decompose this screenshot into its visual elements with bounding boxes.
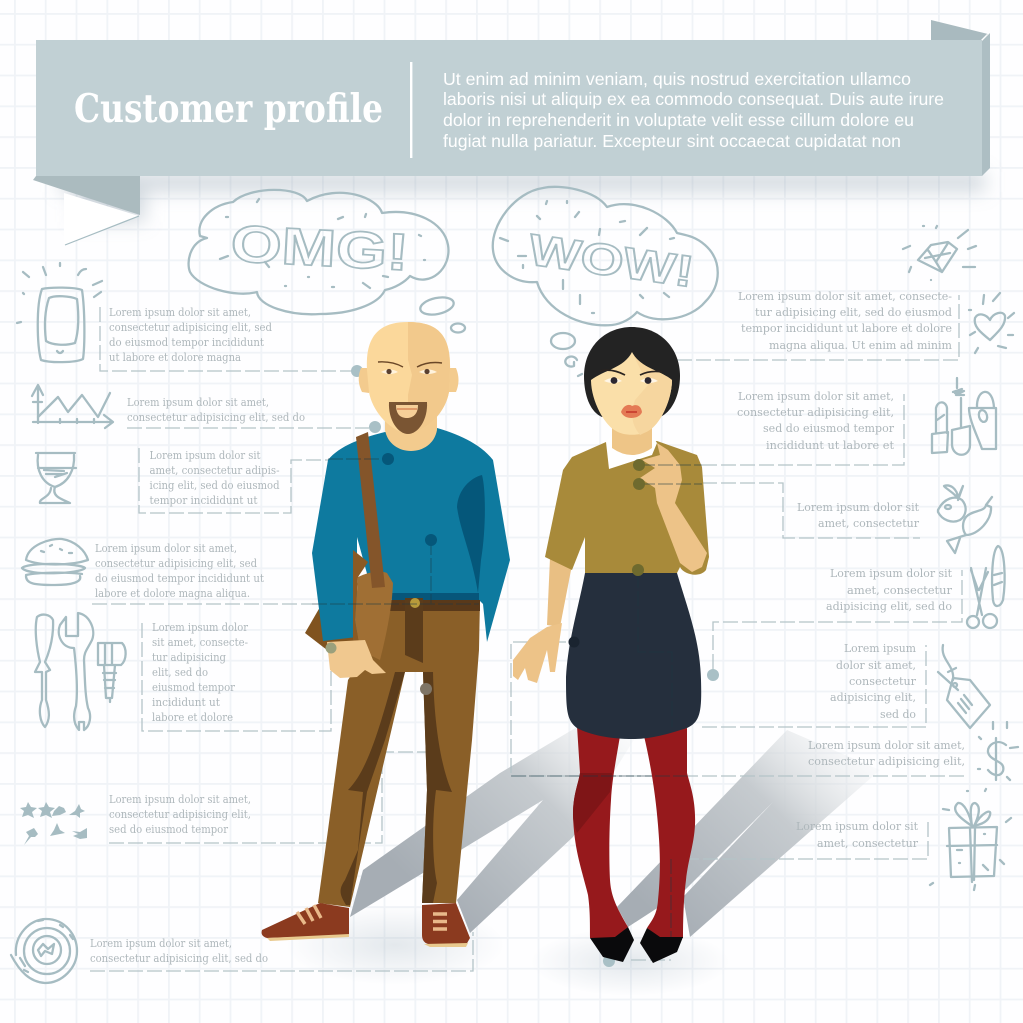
- text block: heart: tur adipisicing elit, sed do eiusmod: [755, 305, 952, 319]
- text block: stars: [109, 792, 251, 836]
- text block: burger: [95, 541, 265, 600]
- woman neck: [612, 420, 652, 455]
- text block: tag: consectetur: [849, 674, 916, 688]
- text block: tire: Lorem ipsum dolor sit amet,: [90, 936, 232, 950]
- text block: burger: do eiusmod tempor incididunt ut: [95, 571, 265, 585]
- icon: line chart: [32, 385, 113, 428]
- banner drop shadow: [60, 172, 985, 222]
- text blocks left: [90, 305, 305, 965]
- text block: scissors: Lorem ipsum dolor sit: [830, 566, 953, 580]
- woman left hand: [513, 623, 562, 683]
- text block: tools: [152, 620, 248, 724]
- text block: phone: [109, 305, 272, 364]
- icon: tire: [11, 919, 77, 983]
- text block: tools: incididunt ut: [152, 695, 221, 709]
- text block: dollar: Lorem ipsum dolor sit amet,: [808, 738, 965, 752]
- text block: burger: consectetur adipisicing elit, sed: [95, 556, 257, 570]
- text block: tools: eiusmod tempor: [152, 680, 235, 694]
- text block: tools: tur adipisicing: [152, 650, 226, 664]
- icon: cosmetics: [932, 378, 996, 455]
- text block: heart: tempor incididunt ut labore et dolore: [741, 321, 952, 335]
- man mouth: [396, 405, 418, 418]
- woman collar: [606, 435, 657, 469]
- text block: cosmetics: sed do eiusmod tempor: [763, 421, 894, 435]
- banner paragraph: Ut enim ad minim veniam, quis nostrud exercitation ullamco: [443, 69, 911, 89]
- icon: wine glass: [36, 453, 76, 503]
- connector lines right: [511, 295, 964, 960]
- banner paragraph: fugiat nulla pariatur. Excepteur sint occaecat cupidatat non: [443, 131, 901, 151]
- text block: glass: tempor incididunt ut: [150, 493, 258, 507]
- text block: tools: Lorem ipsum dolor: [152, 620, 248, 634]
- text block: phone: Lorem ipsum dolor sit amet,: [109, 305, 251, 319]
- icon: diamond: [903, 226, 976, 280]
- banner divider: [410, 62, 412, 158]
- woman left arm: [547, 558, 572, 627]
- text block: chart: [127, 395, 305, 424]
- text block: tools: elit, sed do: [152, 665, 208, 679]
- connector dots light: [351, 365, 719, 967]
- woman figure: [511, 327, 709, 963]
- icon: stars: [20, 802, 87, 845]
- text block: gift: Lorem ipsum dolor sit: [796, 819, 919, 833]
- text block: stars: consectetur adipisicing elit,: [109, 807, 251, 821]
- icon: heart: [969, 293, 1014, 353]
- text blocks right: [737, 289, 965, 850]
- cast shadow: man: [350, 727, 640, 933]
- speech bubble: OMG: OMG!: [229, 215, 410, 282]
- woman lips: [621, 405, 642, 418]
- text block: glass: icing elit, sed do eiusmod: [150, 478, 280, 492]
- man figure: [262, 322, 510, 947]
- title: Customer profile: [74, 86, 383, 132]
- text block: heart: Lorem ipsum dolor sit amet, consecte-: [738, 289, 953, 303]
- icon: gift: [930, 789, 1011, 890]
- text block: phone: consectetur adipisicing elit, sed: [109, 320, 272, 334]
- woman shoes: [590, 927, 634, 962]
- text block: glass: [150, 448, 280, 507]
- text block: stars: Lorem ipsum dolor sit amet,: [109, 792, 251, 806]
- icon: candy bird: [938, 486, 992, 553]
- text block: dollar: consectetur adipisicing elit,: [808, 754, 965, 768]
- man ears and neck: [359, 368, 458, 451]
- man connector overlays: [312, 453, 479, 695]
- woman right hand: [640, 443, 682, 503]
- icon: baguette and scissors: [967, 546, 1005, 628]
- text block: glass: amet, consectetur adipis-: [150, 463, 280, 477]
- trouser shading: [341, 672, 452, 905]
- cast shadow: woman: [617, 730, 880, 937]
- man hand: [327, 640, 386, 678]
- text block: candy bird: Lorem ipsum dolor sit: [797, 500, 920, 514]
- connector lines left: [90, 307, 473, 971]
- woman eyes and brows: [600, 370, 662, 384]
- icon: dollar sign: [978, 722, 1018, 780]
- icon: price tag: [938, 645, 990, 728]
- text block: cosmetics: consectetur adipisicing elit,: [737, 405, 894, 419]
- woman hair: [584, 327, 680, 417]
- bag strap: [356, 432, 385, 588]
- icon: phone: [17, 263, 102, 362]
- text block: gift: [796, 819, 919, 850]
- man eyes and brows: [378, 362, 442, 374]
- text block: candy bird: amet, consectetur: [818, 516, 919, 530]
- text block: burger: Lorem ipsum dolor sit amet,: [95, 541, 237, 555]
- text block: tag: sed do: [880, 707, 916, 721]
- belt flap: [405, 598, 423, 663]
- header ribbon: [33, 20, 990, 245]
- icon: burger: [22, 539, 88, 585]
- woman skirt: [566, 573, 701, 739]
- man trousers: [318, 600, 480, 907]
- man sweater: [312, 428, 510, 642]
- man shoes: [262, 903, 470, 947]
- text block: tools: labore et dolore: [152, 710, 233, 724]
- woman connector overlays: [511, 459, 702, 937]
- woman top: [545, 441, 709, 575]
- text block: burger: labore et dolore magna aliqua.: [95, 586, 250, 600]
- text block: cosmetics: [737, 389, 895, 452]
- icon: tools: [35, 613, 126, 730]
- text block: glass: Lorem ipsum dolor sit: [150, 448, 261, 462]
- text block: tag: dolor sit amet,: [836, 658, 916, 672]
- man beard: [389, 402, 427, 434]
- speech bubble: OMG: [189, 190, 465, 332]
- ground shadows under figures: [285, 905, 730, 996]
- belt: [390, 600, 480, 611]
- woman legs: [573, 726, 628, 938]
- woman face: [591, 352, 672, 435]
- text block: cosmetics: Lorem ipsum dolor sit amet,: [738, 389, 894, 403]
- bag back: [305, 550, 360, 650]
- belt buckle: [410, 598, 420, 608]
- speech bubble: WOW: WOW!: [526, 225, 697, 297]
- text block: tag: [830, 641, 916, 721]
- speech bubble: WOW: [493, 187, 718, 376]
- text block: candy bird: [797, 500, 920, 530]
- text block: cosmetics: incididunt ut labore et: [766, 438, 895, 452]
- text block: scissors: [826, 566, 953, 613]
- banner paragraph: [443, 69, 944, 151]
- man head: [367, 322, 450, 434]
- text block: chart: Lorem ipsum dolor sit amet,: [127, 395, 269, 409]
- text block: gift: amet, consectetur: [817, 836, 918, 850]
- text block: phone: ut labore et dolore magna: [109, 350, 241, 364]
- text block: heart: [738, 289, 953, 352]
- woman forearm: [657, 503, 707, 572]
- text block: tire: [90, 936, 268, 965]
- sweater arm shade: [457, 475, 485, 593]
- text block: phone: do eiusmod tempor incididunt: [109, 335, 265, 349]
- belt band: [392, 593, 479, 601]
- text block: tools: sit amet, consecte-: [152, 635, 248, 649]
- banner paragraph: laboris nisi ut aliquip ex ea commodo consequat. Duis aute irure: [443, 89, 944, 109]
- text block: stars: sed do eiusmod tempor: [109, 822, 228, 836]
- text block: tag: adipisicing elit,: [830, 690, 916, 704]
- banner paragraph: dolor in reprehenderit in voluptate velit esse cillum dolore eu: [443, 110, 914, 130]
- text block: tire: consectetur adipisicing elit, sed do: [90, 951, 268, 965]
- text block: chart: consectetur adipisicing elit, sed do: [127, 410, 305, 424]
- text block: tag: Lorem ipsum: [844, 641, 916, 655]
- text block: scissors: adipisicing elit, sed do: [826, 599, 952, 613]
- text block: scissors: amet, consectetur: [847, 583, 952, 597]
- text block: dollar: [808, 738, 965, 768]
- text block: heart: magna aliqua. Ut enim ad minim: [769, 338, 952, 352]
- bag front: [355, 572, 393, 660]
